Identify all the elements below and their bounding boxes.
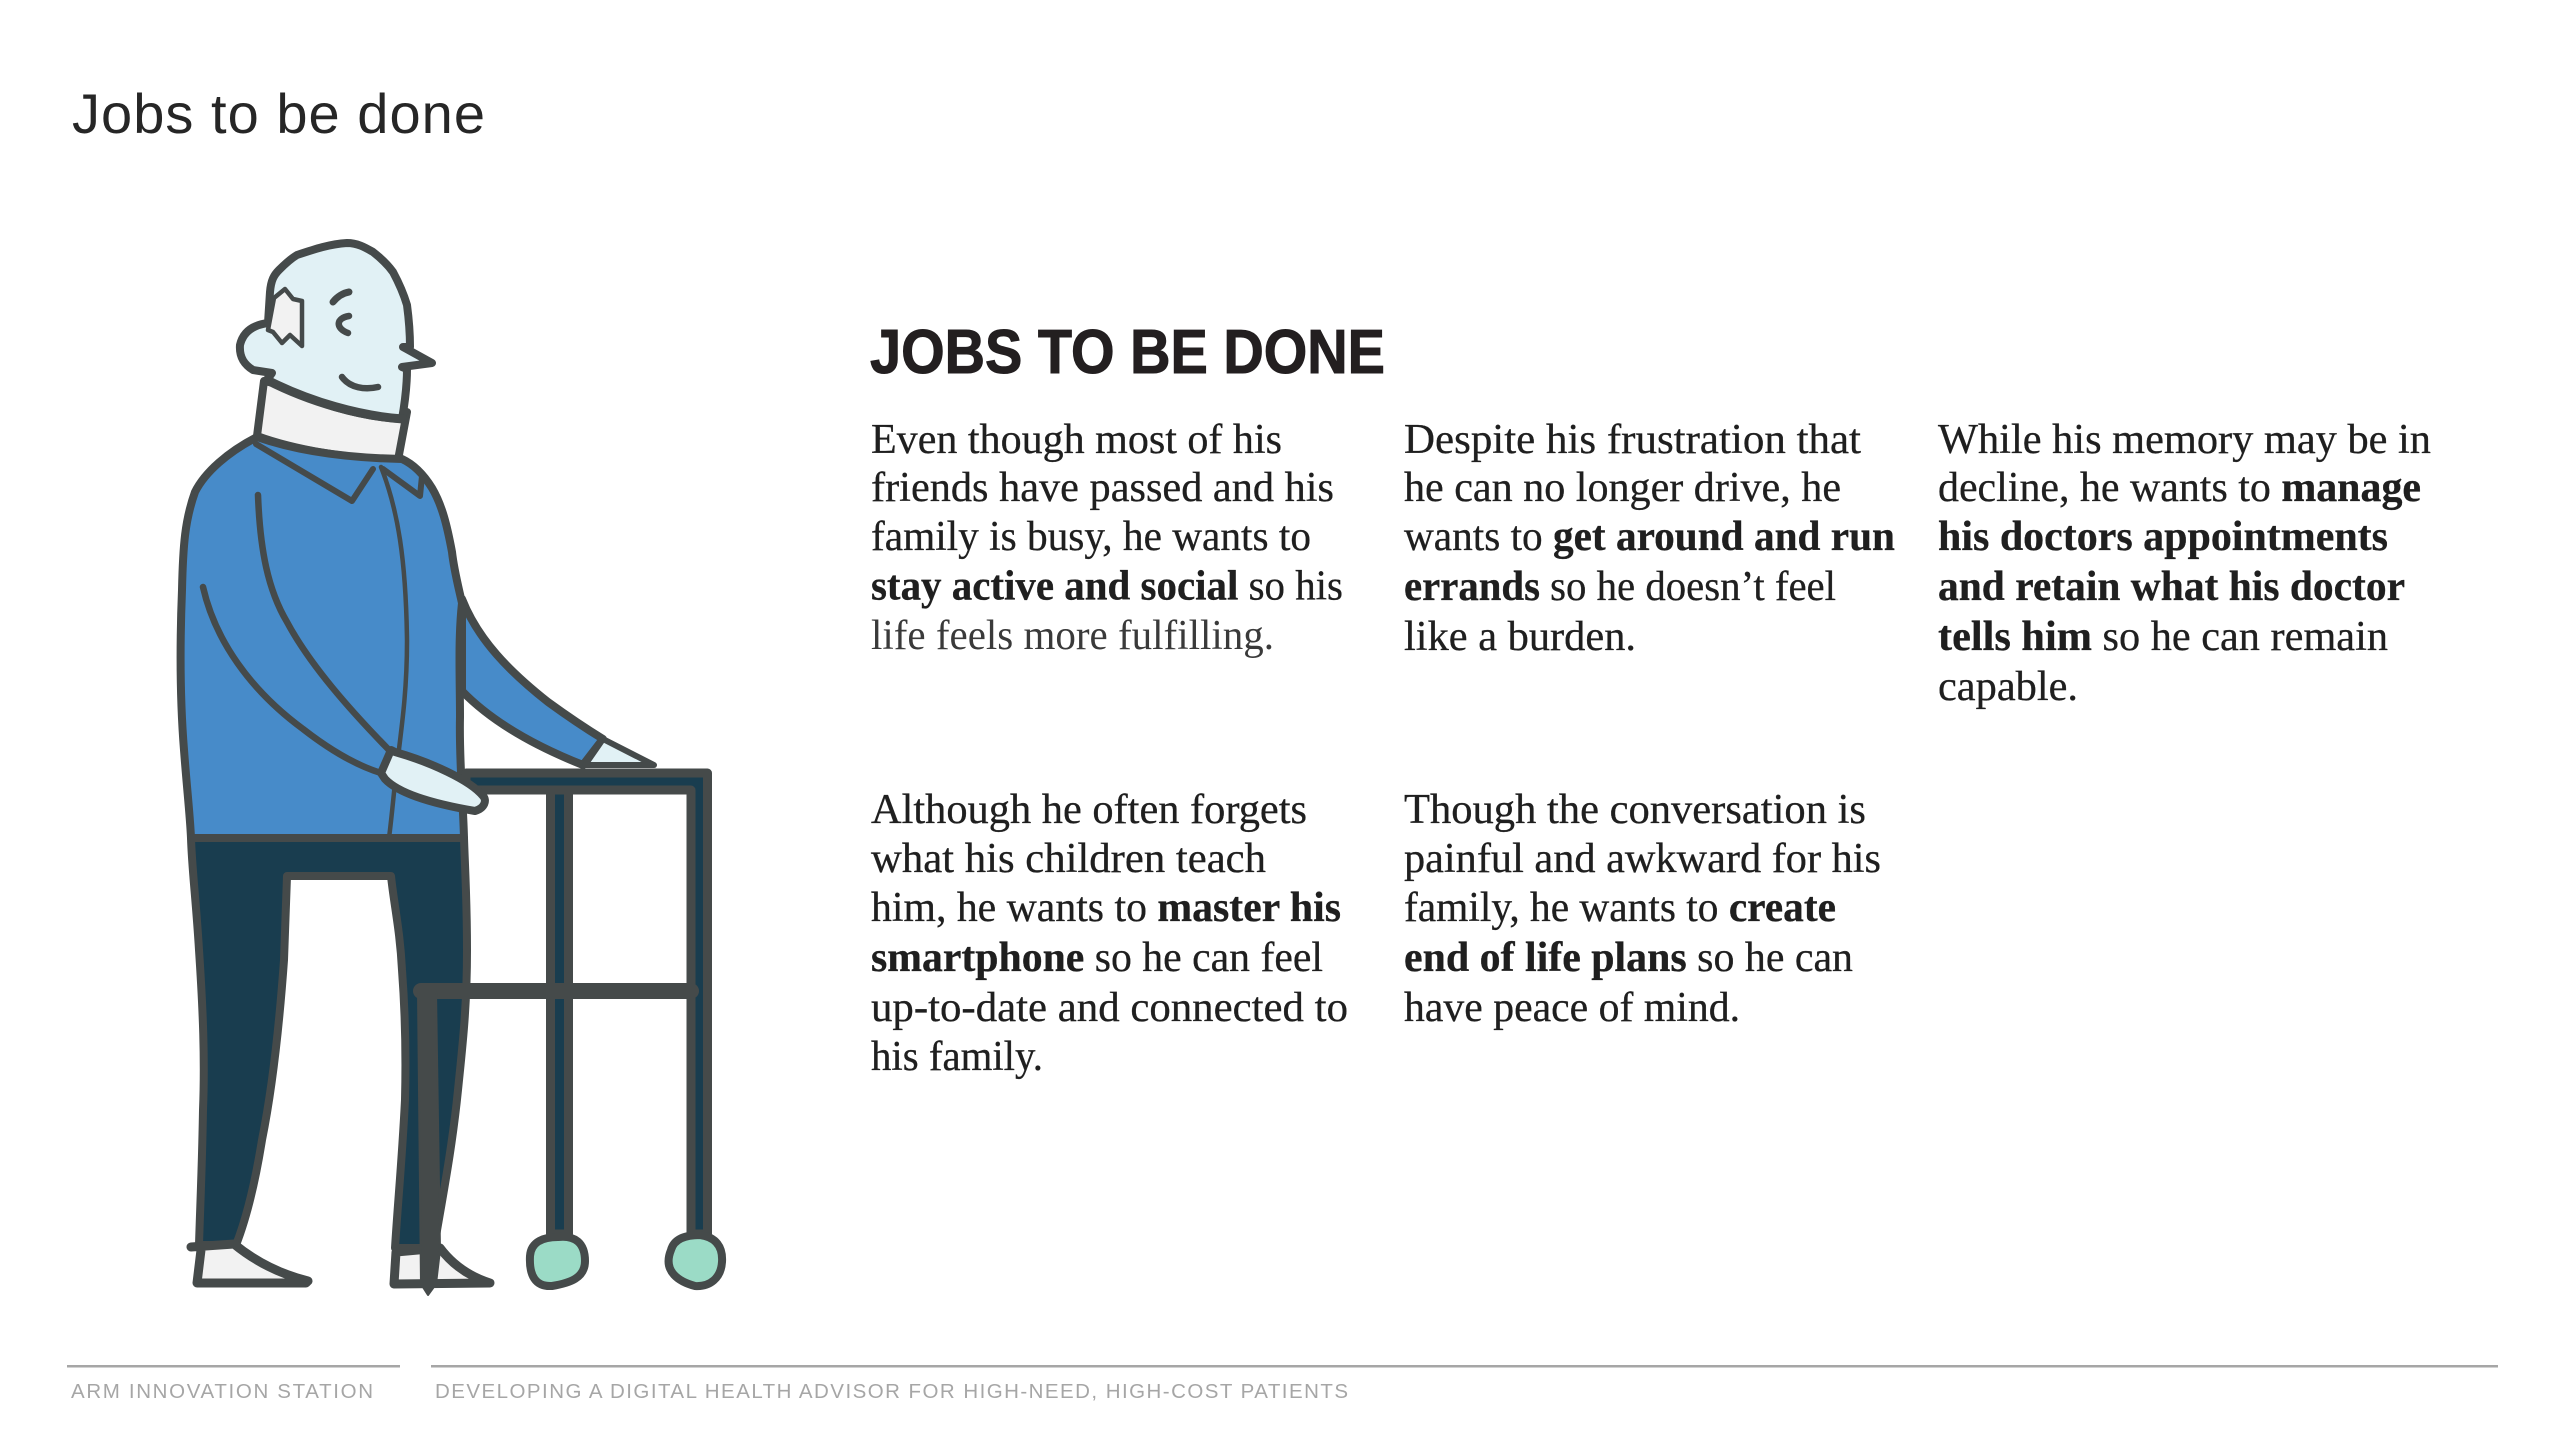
mouth (342, 377, 378, 388)
text block: manage appointments: and retain what his doctor (1938, 563, 2405, 610)
shoe left (191, 1244, 308, 1283)
text block: manage appointments: capable. (1938, 663, 2078, 710)
neck (257, 381, 407, 460)
far hand (585, 739, 654, 765)
text block: get around: wants to get around and run (1404, 513, 1895, 560)
far arm (462, 599, 603, 765)
text block: get around (1404, 416, 1895, 660)
text block: get around: he can no longer drive, he (1404, 464, 1841, 511)
front leg pole (418, 992, 440, 1295)
walker frame (418, 773, 708, 1295)
top bar and right post (466, 773, 708, 1234)
near arm lines (258, 495, 389, 750)
text block: master smartphone: his family. (871, 1033, 1043, 1080)
title: Jobs to be done (72, 82, 485, 145)
text block: end of life plans: family, he wants to create (1404, 884, 1836, 931)
footer: left: ARM INNOVATION STATION (71, 1380, 373, 1403)
text block: end of life plans (1404, 786, 1881, 1031)
text block: master smartphone: smartphone so he can feel (871, 934, 1323, 981)
head (240, 243, 432, 419)
text block: stay active: friends have passed and his (871, 464, 1334, 511)
shirt (181, 437, 464, 838)
text block: stay active: family is busy, he wants to (871, 513, 1311, 560)
eye (339, 316, 349, 333)
text block: get around: like a burden. (1404, 613, 1636, 660)
text block: master smartphone: Although he often forgets (871, 786, 1307, 833)
text block: end of life plans: end of life plans so he can (1404, 934, 1853, 981)
footer: right: DEVELOPING A DIGITAL HEALTH ADVISOR FOR HIGH-NEED, HIGH-COST PATIENTS (435, 1380, 1348, 1403)
text block: manage appointments: While his memory may be in (1938, 416, 2431, 463)
text block: end of life plans: Though the conversation is (1404, 786, 1866, 833)
shirt collar (256, 444, 422, 501)
lower crossbar (421, 983, 691, 999)
heading: JOBS TO BE DONE (870, 318, 1385, 387)
hair patch (268, 289, 302, 346)
text block: manage appointments (1938, 416, 2431, 710)
shirt placket (381, 467, 407, 838)
text block: master smartphone: him, he wants to master his (871, 884, 1341, 931)
jaw line (267, 380, 403, 419)
eyebrow (333, 292, 349, 302)
text block: end of life plans: have peace of mind. (1404, 984, 1740, 1031)
text block: stay active: life feels more fulfilling. (871, 612, 1274, 659)
text block: manage appointments: decline, he wants to manage (1938, 464, 2421, 511)
text block: master smartphone: up-to-date and connected to (871, 984, 1348, 1031)
pants (191, 838, 467, 1248)
text block: stay active: stay active and social so his (871, 562, 1343, 610)
walker wheels (530, 1237, 585, 1286)
text block: end of life plans: painful and awkward for his (1404, 835, 1881, 882)
text block: stay active: Even though most of his (871, 416, 1282, 463)
illustration: old man with walker (181, 243, 722, 1295)
text block: stay active (871, 416, 1343, 659)
text block: master smartphone (871, 786, 1348, 1080)
text block: master smartphone: what his children teach (871, 835, 1266, 882)
near cuff and hand (381, 750, 485, 811)
text block: get around: errands so he doesn’t feel (1404, 563, 1836, 610)
text block: manage appointments: his doctors appointments (1938, 513, 2388, 560)
middle post (550, 790, 568, 1234)
text block: manage appointments: tells him so he can remain (1938, 613, 2388, 660)
shoe right (394, 1248, 490, 1284)
text block: get around: Despite his frustration that (1404, 416, 1861, 463)
